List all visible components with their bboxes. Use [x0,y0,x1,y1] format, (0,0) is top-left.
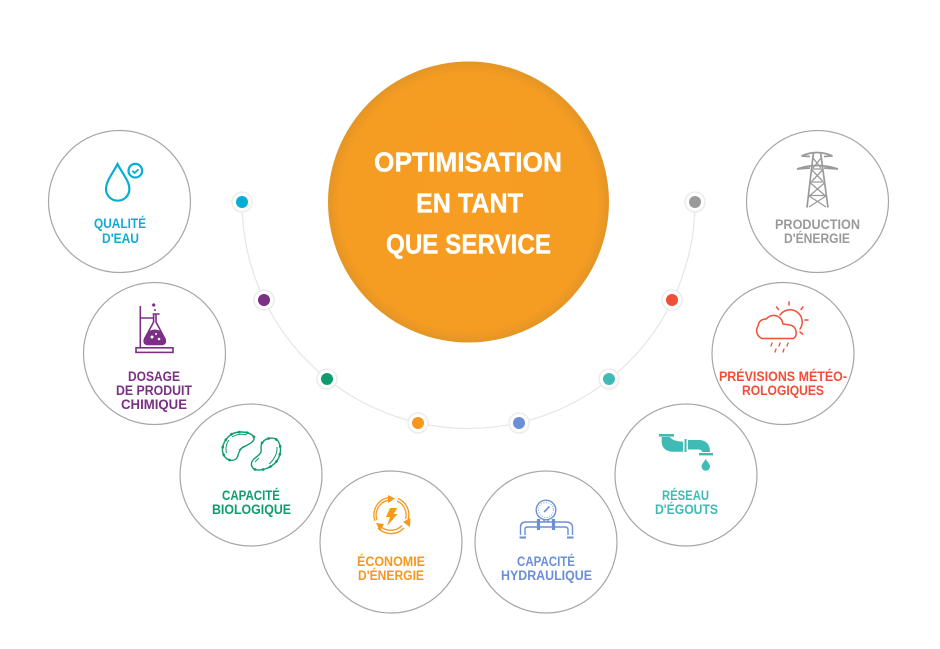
icon: bacteria [222,432,280,470]
connecting arc with coloured dots [232,192,705,433]
label: DE PRODUIT [116,383,193,398]
panel: qualité d'eau [48,130,190,272]
label: D'ÉNERGIE [784,231,850,246]
label: D'EAU [102,231,139,246]
label: CAPACITÉ [222,488,280,503]
panel: production d'énergie [746,130,888,272]
label [116,369,193,412]
title [374,146,562,260]
label [655,488,718,517]
icon: chemistry flask on stand [136,303,173,352]
label [357,554,425,583]
label: D'ÉNERGIE [358,568,424,583]
panel: réseau d'égouts [615,404,757,546]
icon: recycling arrows with lightning bolt [374,495,410,534]
title: OPTIMISATION [374,146,562,178]
title: EN TANT [416,188,523,218]
label: ROLOGIQUES [742,383,824,398]
icon: water drop with check badge [106,164,142,201]
label [719,369,847,398]
icon: dripping pipe [659,434,713,471]
title: QUE SERVICE [386,228,551,260]
label: PRÉVISIONS MÉTÉO- [719,369,847,384]
icon: electricity pylon [797,152,838,208]
label [212,488,291,517]
central circle with title [328,62,609,342]
label [775,217,860,246]
label: RÉSEAU [662,488,709,503]
label: PRODUCTION [775,217,860,232]
label: CAPACITÉ [517,554,575,569]
panel: dosage de produit chimique [84,282,226,424]
panel: prévisions météorologiques [712,282,854,424]
label: DOSAGE [128,369,180,384]
panel: capacité biologique [180,404,322,546]
label: CHIMIQUE [121,397,187,412]
label: HYDRAULIQUE [501,568,592,583]
label: D'ÉGOUTS [655,502,718,517]
label: BIOLOGIQUE [212,502,291,517]
label: QUALITÉ [94,216,146,231]
label [94,216,146,246]
panel: capacité hydraulique [475,471,617,613]
label [501,554,592,583]
icon: pipe with pressure gauge [520,500,574,538]
panel: économie d'énergie [320,471,462,613]
label: ÉCONOMIE [357,554,425,569]
icon: sun behind rain cloud [757,302,808,352]
